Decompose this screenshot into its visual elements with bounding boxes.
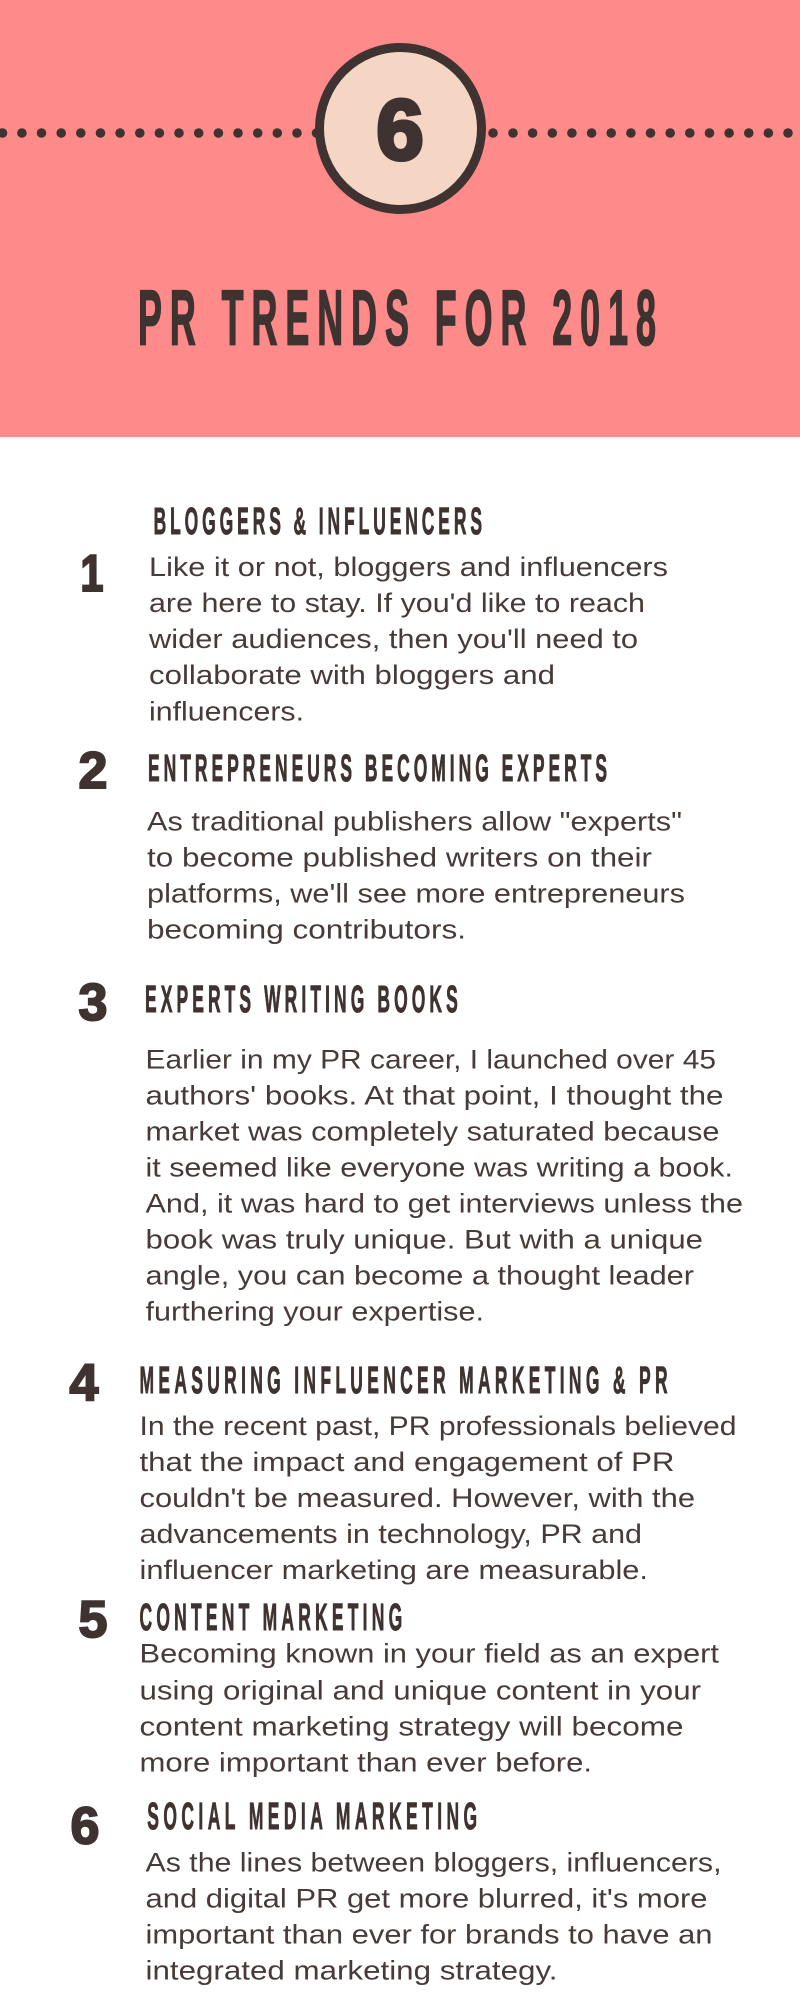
body 4: that the impact and engagement of PR — [140, 1447, 674, 1477]
body 1: influencers. — [149, 696, 304, 726]
number 2: 2 — [79, 742, 107, 800]
number 6: 6 — [71, 1798, 99, 1856]
body 4: In the recent past, PR professionals believed — [140, 1411, 736, 1441]
body 1: collaborate with bloggers and — [149, 660, 555, 690]
body 1: are here to stay. If you'd like to reach — [149, 588, 645, 618]
heading 4: MEASURING INFLUENCER MARKETING & PR — [140, 1360, 668, 1402]
body 3: authors' books. At that point, I thought the — [146, 1080, 724, 1110]
body 3: market was completely saturated because — [146, 1116, 720, 1146]
body 1: Like it or not, bloggers and influencers — [149, 552, 668, 582]
body 5: Becoming known in your field as an expert — [140, 1639, 720, 1669]
body 5 — [140, 1639, 720, 1777]
heading 3: EXPERTS WRITING BOOKS — [145, 979, 458, 1021]
body 3: furthering your expertise. — [146, 1296, 484, 1326]
body 4: influencer marketing are measurable. — [140, 1555, 648, 1585]
body 2: platforms, we'll see more entrepreneurs — [147, 879, 685, 909]
body 6: As the lines between bloggers, influencers, — [146, 1847, 722, 1877]
body 4: couldn't be measured. However, with the — [140, 1483, 695, 1513]
body 5: content marketing strategy will become — [140, 1711, 684, 1741]
number 3: 3 — [79, 974, 107, 1032]
trend 1: bloggers and influencers — [80, 501, 668, 726]
trend 4: measuring influencer marketing and PR — [70, 1354, 736, 1585]
body 6 — [146, 1847, 722, 1985]
heading 5: CONTENT MARKETING — [140, 1597, 402, 1639]
trend 2: entrepreneurs becoming experts — [79, 742, 685, 945]
trend 3: experts writing books — [79, 974, 743, 1326]
number 4: 4 — [70, 1354, 99, 1412]
body 2 — [147, 807, 685, 945]
body 5: more important than ever before. — [140, 1747, 592, 1777]
body 6: important than ever for brands to have an — [146, 1919, 712, 1949]
body 6: integrated marketing strategy. — [146, 1955, 558, 1985]
body 2: As traditional publishers allow "experts" — [147, 807, 682, 837]
number 5: 5 — [79, 1591, 107, 1649]
body 1 — [148, 552, 668, 726]
body 3: And, it was hard to get interviews unless the — [146, 1188, 743, 1218]
title: PR TRENDS FOR 2018 — [138, 274, 656, 361]
body 5: using original and unique content in your — [140, 1675, 701, 1705]
body 4: advancements in technology, PR and — [140, 1519, 642, 1549]
body 4 — [140, 1411, 736, 1585]
body 3: angle, you can become a thought leader — [146, 1260, 694, 1290]
number badge: 6 — [376, 83, 424, 178]
body 3: Earlier in my PR career, I launched over 45 — [146, 1044, 716, 1074]
heading 6: SOCIAL MEDIA MARKETING — [147, 1796, 477, 1838]
header panel — [0, 0, 800, 437]
trend 5: content marketing — [79, 1591, 720, 1777]
trend 6: social media marketing — [71, 1796, 722, 1985]
body 6: and digital PR get more blurred, it's more — [146, 1883, 708, 1913]
body 2: to become published writers on their — [147, 843, 652, 873]
body 3: book was truly unique. But with a unique — [146, 1224, 703, 1254]
number badge — [320, 48, 482, 210]
body 3 — [146, 1044, 743, 1326]
body 2: becoming contributors. — [147, 915, 466, 945]
heading 2: ENTREPRENEURS BECOMING EXPERTS — [148, 748, 607, 790]
body 3: it seemed like everyone was writing a book. — [146, 1152, 733, 1182]
heading 1: BLOGGERS & INFLUENCERS — [154, 501, 482, 543]
dotted line — [0, 128, 793, 138]
body 1: wider audiences, then you'll need to — [148, 624, 638, 654]
number 1: 1 — [80, 544, 104, 602]
